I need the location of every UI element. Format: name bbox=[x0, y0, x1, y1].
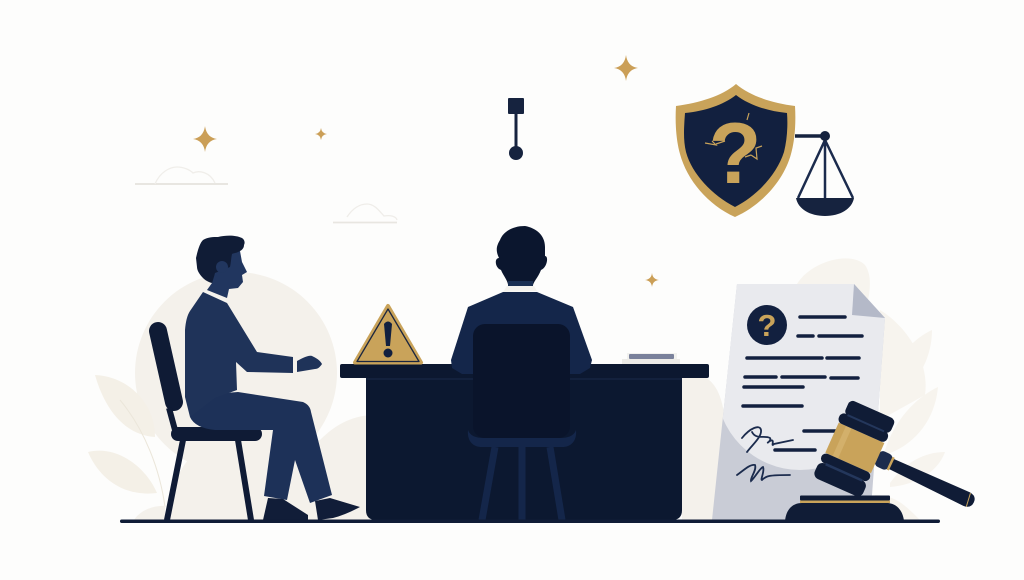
neck bbox=[508, 281, 533, 287]
ear bbox=[216, 261, 228, 273]
neck and face bbox=[207, 251, 247, 298]
head bbox=[496, 226, 547, 287]
icon: cracked shield with question mark bbox=[676, 84, 795, 217]
lawyer: man seen from behind bbox=[451, 226, 592, 520]
sparkle: right small bbox=[645, 273, 659, 287]
sparkle: top large bbox=[614, 55, 638, 81]
decoration: left leaves bbox=[88, 375, 165, 520]
papers on desk bbox=[622, 353, 680, 364]
chair legs bbox=[482, 447, 562, 520]
icon: pin hammer bbox=[508, 98, 524, 160]
illustration: legal consultation scene bbox=[88, 55, 975, 523]
cloud: centre bbox=[333, 204, 397, 222]
collar bbox=[503, 286, 537, 292]
background shape: cream circle behind client bbox=[135, 272, 725, 520]
collar bbox=[202, 290, 228, 308]
desk bbox=[340, 364, 709, 520]
decoration: right leaves bbox=[797, 258, 945, 520]
ground line bbox=[120, 520, 940, 523]
legal document bbox=[712, 284, 885, 520]
text lines bbox=[743, 317, 862, 450]
shoes bbox=[263, 498, 308, 520]
icon: scales of justice bbox=[795, 131, 854, 216]
question mark: ? bbox=[709, 106, 761, 202]
chair back bbox=[473, 324, 570, 438]
cloud: left bbox=[135, 167, 228, 184]
question badge: ? bbox=[758, 308, 776, 343]
hand bbox=[297, 356, 322, 372]
sparkle: left large bbox=[193, 126, 217, 152]
hair bbox=[196, 236, 245, 283]
gavel base bbox=[785, 496, 904, 521]
warning triangle sign bbox=[355, 306, 421, 362]
gavel bbox=[785, 398, 977, 521]
jacket bbox=[451, 292, 592, 374]
gavel head bbox=[812, 398, 896, 498]
client: seated man in profile bbox=[158, 236, 360, 520]
legs bbox=[190, 392, 332, 503]
jacket bbox=[185, 292, 293, 417]
signature two bbox=[737, 465, 790, 481]
gavel handle bbox=[873, 449, 977, 510]
sparkle: left small bbox=[315, 128, 327, 140]
chair bbox=[158, 331, 262, 520]
page fold bbox=[852, 284, 885, 318]
signature one bbox=[742, 427, 793, 452]
question badge bbox=[747, 305, 787, 345]
chair seat bbox=[468, 430, 576, 447]
